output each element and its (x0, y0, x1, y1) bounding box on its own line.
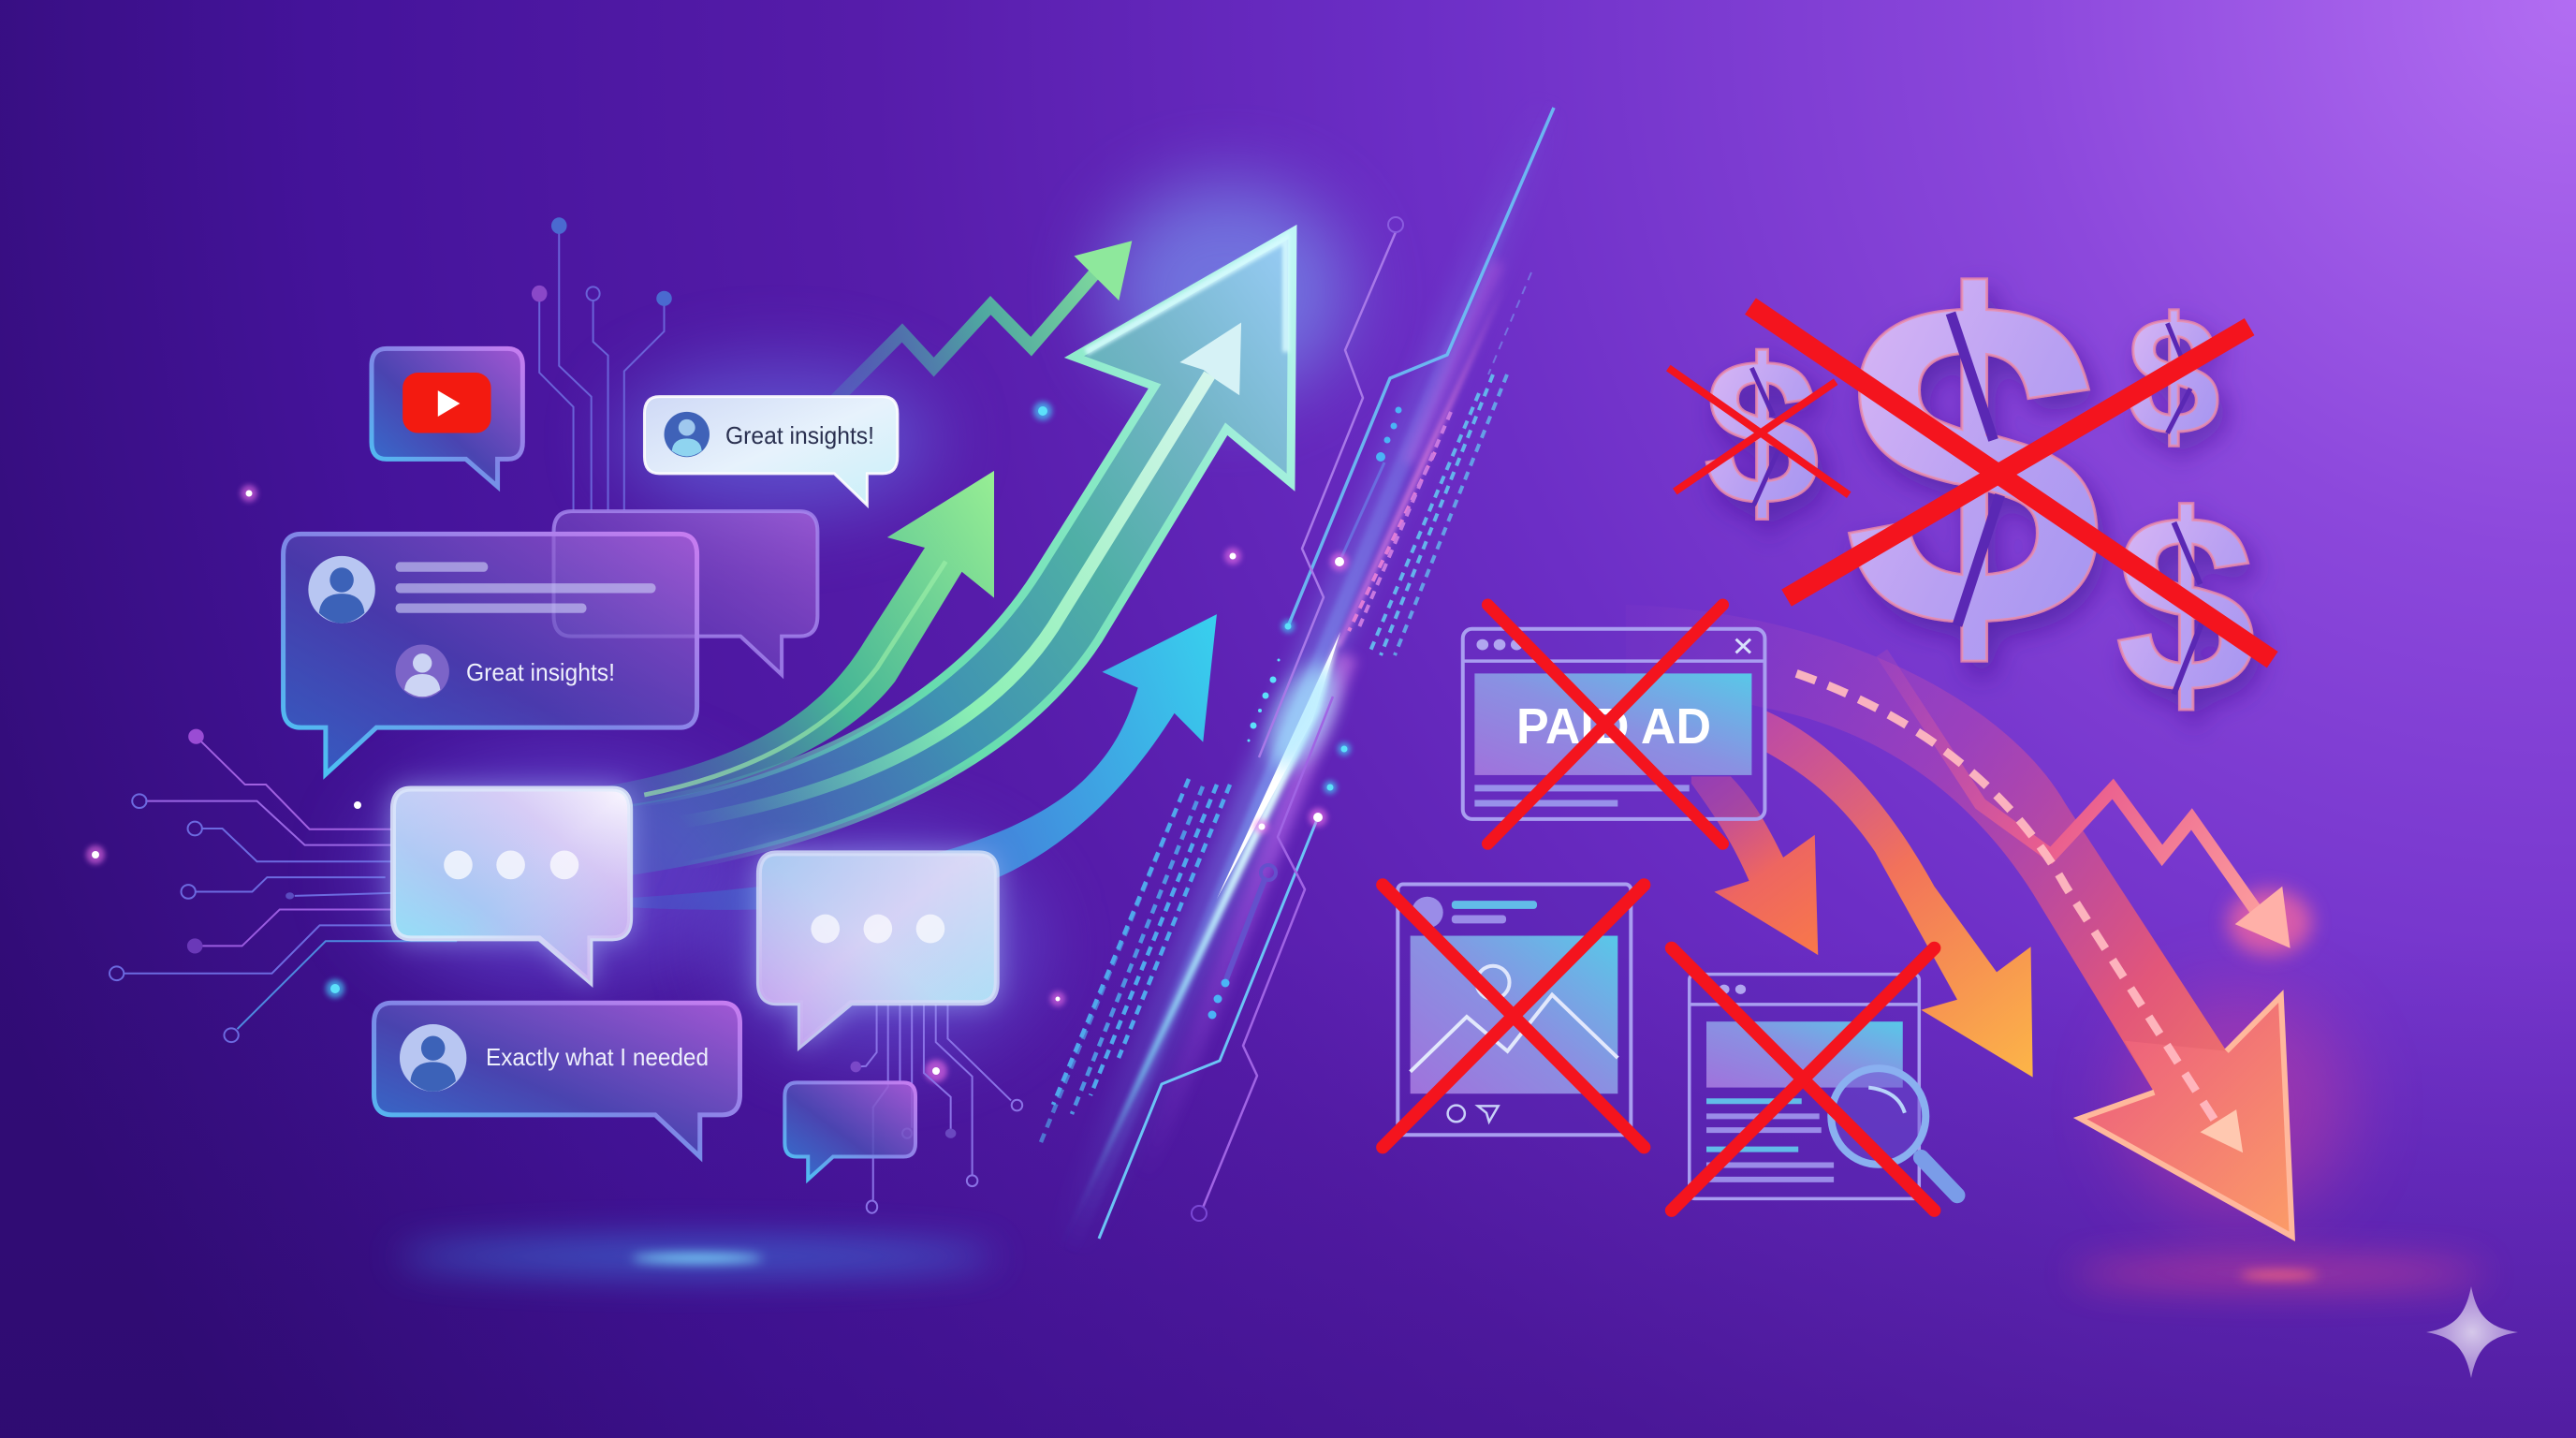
bubble: large comment (284, 534, 697, 774)
red cross: large dollars (1750, 306, 2273, 660)
circuit traces: left (110, 729, 457, 1042)
icon: four-point sparkle (2426, 1286, 2518, 1378)
dollar crack slashes (1751, 313, 2203, 694)
comment placeholder lines (395, 562, 656, 613)
icon: social post window (1398, 885, 1631, 1135)
glow: floor left (398, 1240, 997, 1273)
data rain: upper (1349, 272, 1531, 655)
icon: search results window (1690, 975, 1957, 1198)
bubble: typing dots left (393, 788, 630, 982)
icon: small avatar (395, 644, 449, 698)
icon: avatar (308, 556, 375, 624)
arrow: short red falling (1691, 776, 1818, 955)
rising arrows (561, 232, 1293, 910)
glow: floor right core (2240, 1271, 2319, 1279)
arrow: falling zigzag (1881, 653, 2291, 948)
group: dollar signs (1704, 202, 2256, 745)
falling arrows (1626, 605, 2292, 1237)
icon: magnifier (1831, 1068, 1957, 1196)
bubble: exactly what I needed (374, 1003, 740, 1157)
circuit traces: bottom right (851, 1005, 1022, 1213)
arrow: large teal rising (591, 232, 1293, 881)
circuit traces: top (532, 217, 672, 510)
glow: second dot bubble (721, 833, 1039, 1058)
bubble: white comment (644, 397, 898, 506)
arrow: green rising (573, 471, 994, 812)
icon: large dollar: $ (1843, 202, 2103, 726)
magenta streak (1142, 262, 1507, 1180)
icon: lower right dollar: $ (2115, 463, 2256, 745)
glow: behind dot bubbles (365, 758, 758, 983)
icon: avatar (400, 1024, 466, 1092)
divider node dots (1208, 406, 1402, 1019)
glow: behind white comment (618, 365, 936, 515)
glow: floor right (2073, 1260, 2485, 1286)
bubble: small empty (784, 1082, 915, 1180)
icon: avatar (665, 412, 710, 457)
glow: behind rising arrow head (1105, 183, 1348, 398)
red cross: paid ad (1487, 605, 1723, 844)
data rain: lower (1039, 779, 1230, 1147)
bubble: YouTube (372, 348, 522, 487)
circuit traces near divider (1099, 108, 1554, 1239)
red cross: social post (1383, 885, 1644, 1147)
icon: paid ad window (1463, 629, 1764, 819)
icon: YouTube logo (402, 373, 491, 433)
central light divider (1039, 94, 1554, 1283)
red cross: left dollar (1668, 368, 1849, 495)
red cross: search results (1672, 948, 1934, 1211)
arrow: blue rising (561, 614, 1217, 910)
arrow: dashed trend (1796, 673, 2243, 1152)
label: bubble text: Exactly what I needed (486, 1043, 709, 1071)
arrow: medium orange falling (1767, 712, 2033, 1078)
glow: falling arrow head (2125, 992, 2349, 1217)
wide light band (1058, 94, 1554, 1283)
label: paid ad: PAID AD (1516, 698, 1711, 755)
icon: left dollar: $ (1704, 316, 1820, 549)
bubble: back translucent (554, 511, 817, 675)
glow: floor left core (632, 1254, 763, 1263)
icon: top right dollar: $ (2127, 283, 2220, 469)
glow: zigzag arrow tip (2228, 889, 2312, 955)
particles (86, 402, 1351, 1082)
label: white comment text: Great insights! (725, 421, 874, 449)
label: comment text: Great insights! (466, 658, 615, 686)
bubble: typing dots right (759, 853, 997, 1046)
arrow: large falling band (1626, 605, 2292, 1237)
bright core streak (1053, 632, 1351, 1264)
icon: small zigzag trend arrow (835, 241, 1132, 400)
